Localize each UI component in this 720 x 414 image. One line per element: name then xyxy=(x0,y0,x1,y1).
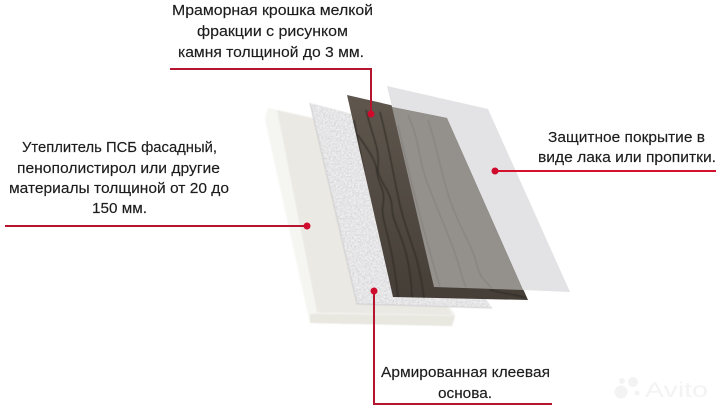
text: insulation description: пенополистирол или другие xyxy=(17,160,220,177)
callout: insulation xyxy=(5,139,310,230)
callout: marble chips xyxy=(170,2,374,118)
layer: protective lacquer coating xyxy=(387,86,570,292)
watermark: Avito xyxy=(614,377,708,402)
leader line: protective coating xyxy=(492,168,716,174)
text: adhesive base description: основа. xyxy=(438,385,492,402)
text: marble chips description: Мраморная крошка мелкой xyxy=(172,2,373,19)
watermark: Avito: Avito xyxy=(645,379,708,402)
text: protective coating description: Защитное покрытие в xyxy=(548,129,705,146)
text: marble chips description: фракции с рисунком xyxy=(197,23,348,40)
text: insulation description xyxy=(9,139,229,217)
text: marble chips description: камня толщиной до 3 мм. xyxy=(178,44,364,61)
callout: protective coating xyxy=(492,129,716,174)
leader line: adhesive base xyxy=(370,288,552,404)
text: protective coating description xyxy=(538,129,716,166)
text: insulation description: 150 мм. xyxy=(92,200,147,217)
text: adhesive base description xyxy=(381,364,550,402)
leader line: marble chips xyxy=(170,69,374,118)
layer: marble chip stone xyxy=(347,95,528,300)
text: protective coating description: виде лака или пропитки. xyxy=(538,149,716,166)
callout: adhesive base xyxy=(370,288,552,404)
text: adhesive base description: Армированная клеевая xyxy=(381,364,550,381)
layer: reinforced adhesive base xyxy=(310,103,492,308)
text: insulation description: Утеплитель ПСБ фасадный, xyxy=(22,139,217,156)
text: marble chips description xyxy=(172,2,373,61)
layer: foam insulation board xyxy=(265,108,455,326)
text: insulation description: материалы толщиной от 20 до xyxy=(9,180,229,197)
leader line: insulation xyxy=(5,222,310,230)
texture: adhesive base surface xyxy=(310,103,492,308)
